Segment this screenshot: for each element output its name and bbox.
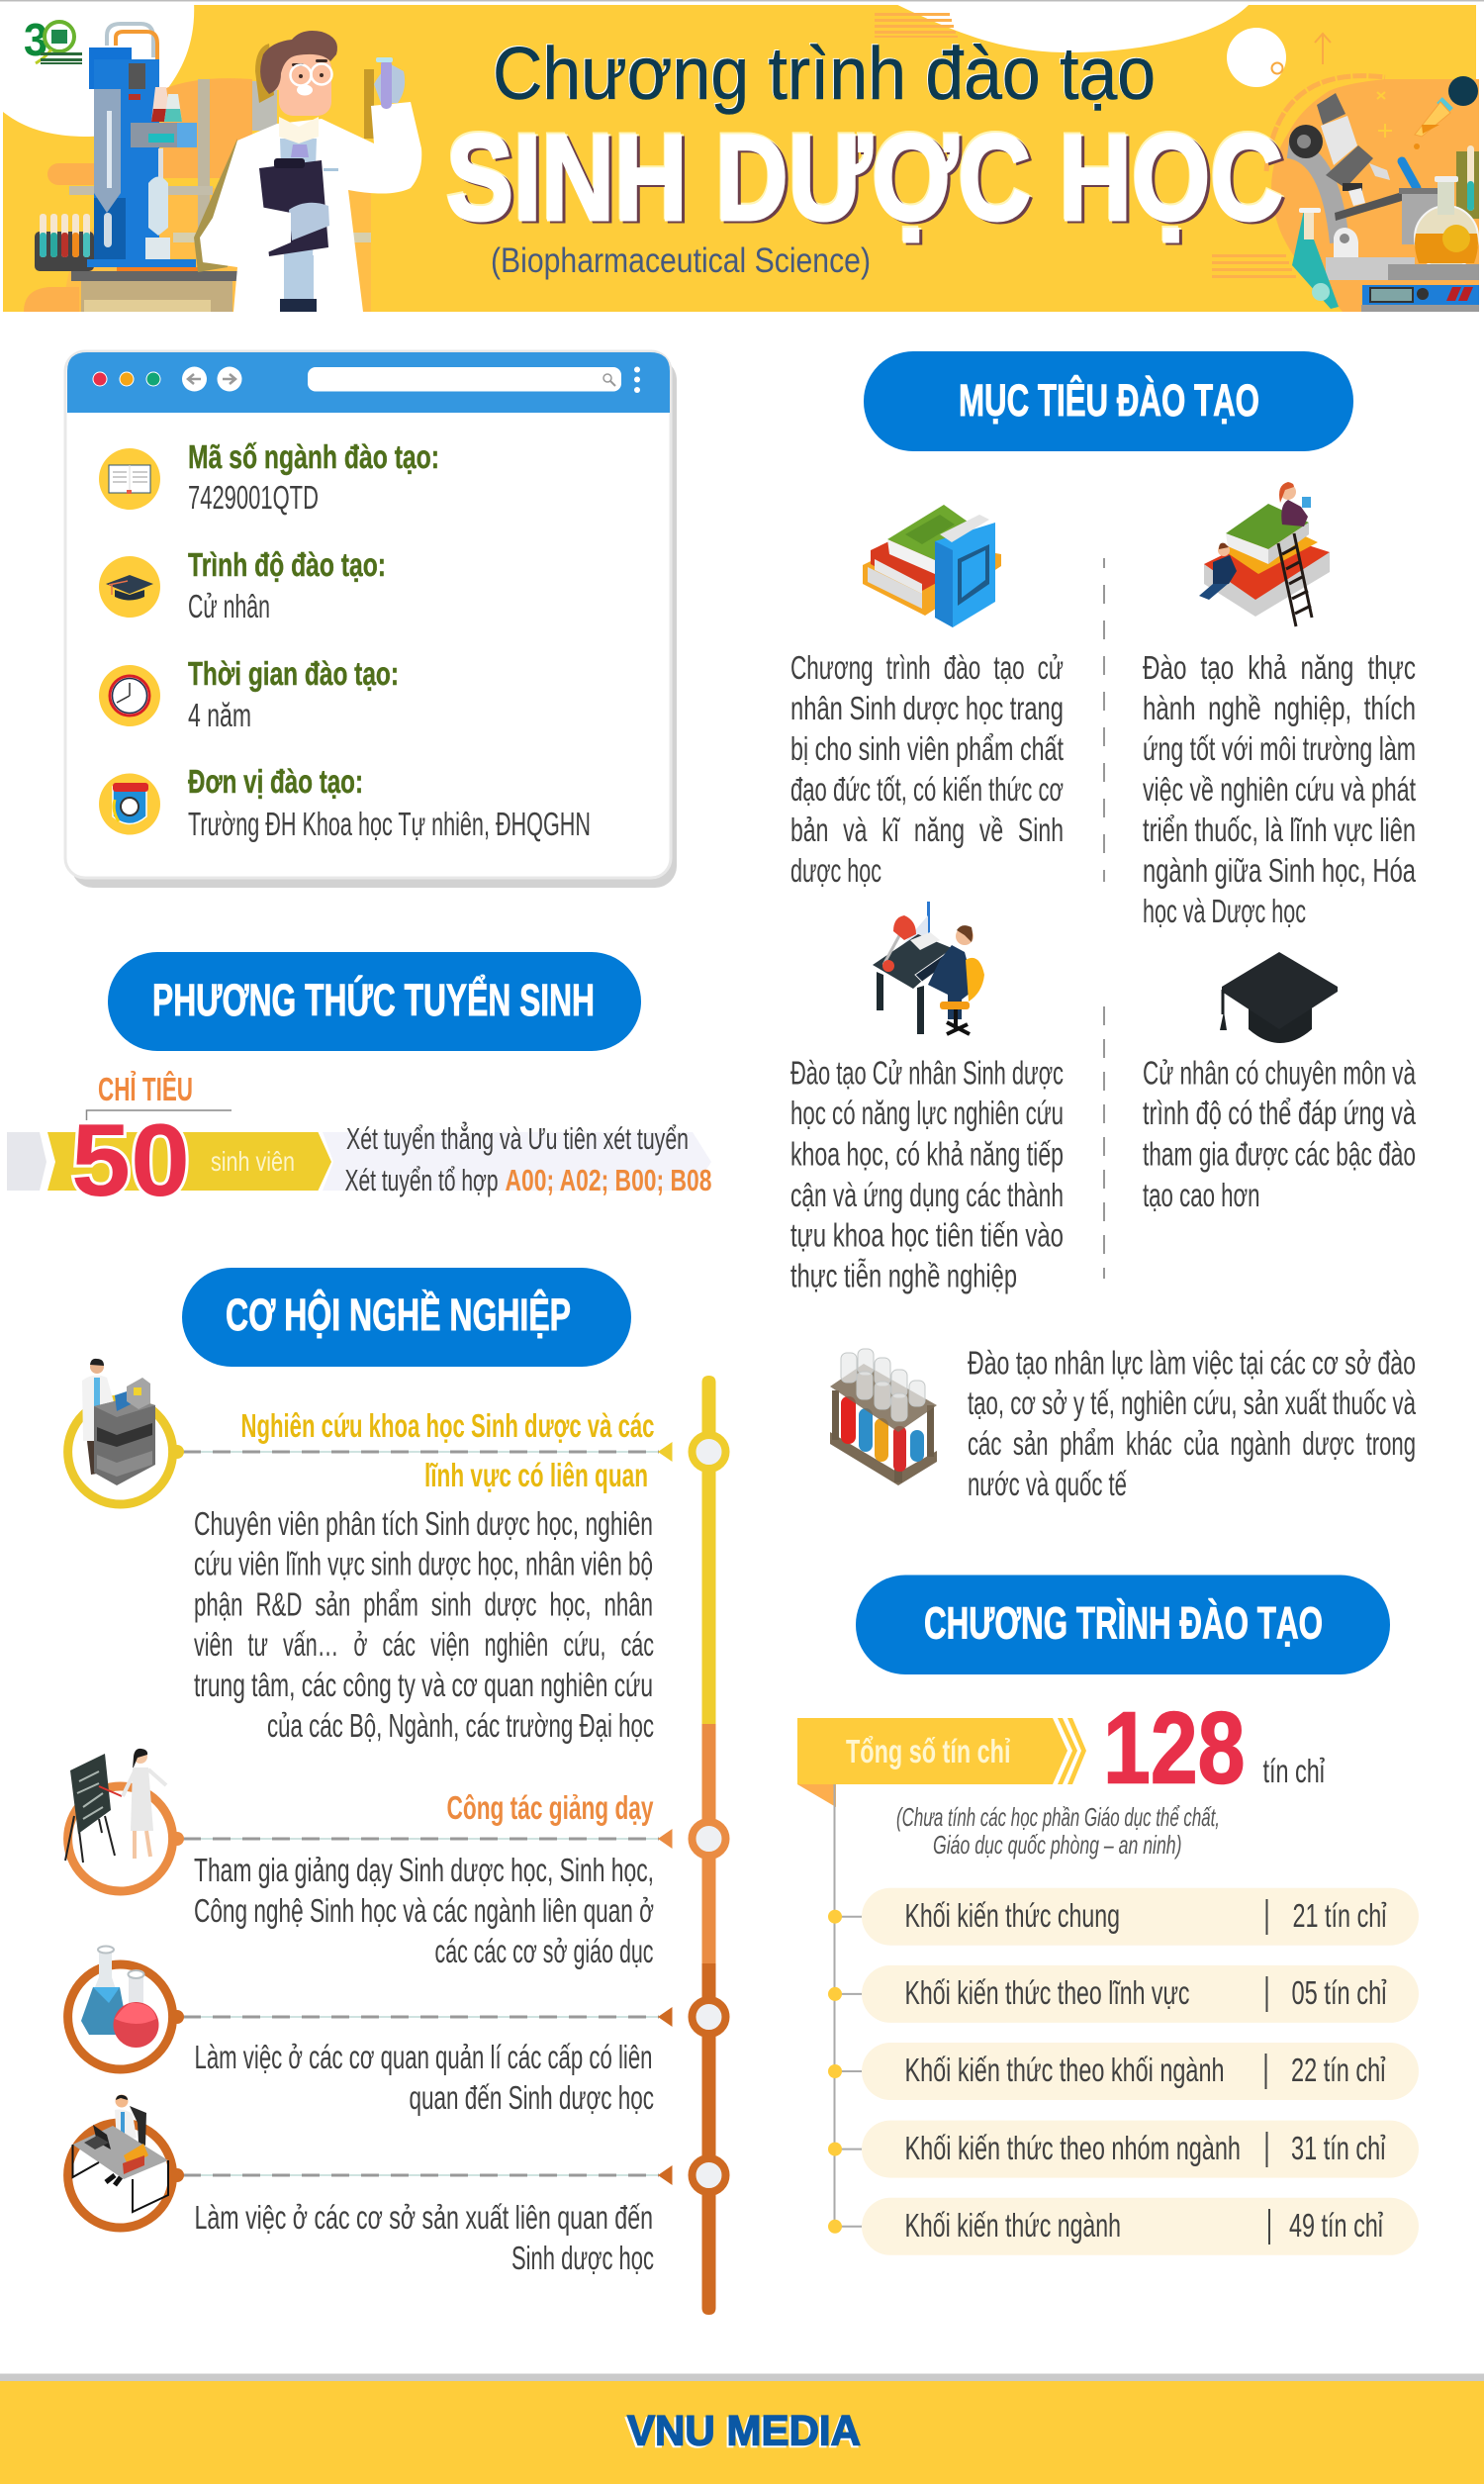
- objective: further study: tạo cao hơn: [1143, 1177, 1260, 1213]
- career item: teaching: [65, 1749, 673, 1969]
- career item: scientific research: trung tâm, các công ty và cơ quan nghiên cứu: [194, 1667, 653, 1703]
- objective: research capability: [790, 902, 1064, 1294]
- objective: research capability: học có năng lực nghiên cứu: [790, 1095, 1064, 1131]
- objective: research capability: khoa học, có khả năng tiếp: [790, 1136, 1064, 1172]
- panel: admission quota: A00; A02; B00; B08: [505, 1163, 712, 1197]
- footer: [0, 2373, 1484, 2484]
- icon: worker at desk: [73, 2094, 168, 2212]
- career item: administration: Làm việc ở các cơ quan quản lí các cấp có liên: [194, 2039, 653, 2075]
- row: general knowledge: 21 tín chỉ: [1292, 1897, 1387, 1934]
- panel: total credits: Giáo dục quốc phòng – an ninh): [933, 1830, 1181, 1860]
- panel: admission quota: sinh viên: [211, 1146, 295, 1177]
- logo: 30 years: [24, 14, 82, 65]
- illustration: laboratory equipment left: [24, 24, 371, 312]
- career item: administration: quan đến Sinh dược học: [410, 2079, 654, 2116]
- icon: graduation cap: [1220, 952, 1338, 1043]
- row: discipline block knowledge: 22 tín chỉ: [1291, 2052, 1386, 2088]
- logo: 30 years: 3: [24, 14, 47, 65]
- objective: ethics and knowledge: nhân Sinh dược học trang: [790, 690, 1064, 726]
- panel: total credits: Tổng số tín chỉ: [846, 1733, 1011, 1769]
- objective: ethics and knowledge: đạo đức tốt, có kiến thức cơ: [790, 771, 1064, 808]
- objective: ethics and knowledge: Chương trình đào tạo cử: [790, 649, 1064, 686]
- career item: teaching: Công tác giảng dạy: [447, 1789, 654, 1826]
- career item: scientific research: Nghiên cứu khoa học Sinh dược và các: [241, 1407, 655, 1444]
- footer: VNU MEDIA: [627, 2407, 861, 2454]
- info row: degree level: Trình độ đào tạo:: [188, 546, 386, 583]
- panel: total credits: [797, 1690, 1325, 1860]
- career item: scientific research: viên tư vấn… ở các viện nghiên cứu, các: [194, 1626, 654, 1663]
- row: field knowledge: Khối kiến thức theo lĩnh vực: [904, 1974, 1189, 2011]
- heading: training objectives: [864, 351, 1353, 451]
- career item: production: [68, 2094, 673, 2276]
- heading: admission methods: PHƯƠNG THỨC TUYỂN SINH: [152, 975, 595, 1025]
- row: general knowledge: [828, 1888, 1419, 1946]
- icon: test tube rack: [830, 1349, 937, 1485]
- panel: admission quota: [7, 1071, 712, 1218]
- objective: ethics and knowledge: bản và kĩ năng về Sinh: [790, 812, 1064, 848]
- panel: admission quota: 50: [71, 1103, 190, 1218]
- info row: major code: Mã số ngành đào tạo:: [188, 438, 439, 475]
- info row: degree level: [99, 546, 386, 624]
- career item: scientific research: [68, 1359, 673, 1744]
- objective: professional practice: [1143, 482, 1416, 929]
- illustration: laboratory equipment right: [1266, 34, 1479, 312]
- row: major knowledge: 49 tín chỉ: [1289, 2207, 1383, 2244]
- objective: further study: [1143, 952, 1416, 1213]
- objective: ethics and knowledge: dược học: [790, 852, 881, 889]
- icon: teacher at blackboard: [65, 1749, 166, 1863]
- icon: stack of books: [863, 505, 1001, 627]
- panel: admission quota: Xét tuyển tổ hợp: [344, 1163, 499, 1197]
- info row: major code: 7429001QTD: [188, 479, 319, 516]
- row: major knowledge: Khối kiến thức ngành: [904, 2207, 1121, 2244]
- objective: research capability: thực tiễn nghề nghiệp: [790, 1257, 1017, 1294]
- panel: program information browser card: [65, 351, 677, 888]
- row: field knowledge: 05 tín chỉ: [1292, 1974, 1387, 2011]
- info row: training unit: Đơn vị đào tạo:: [188, 763, 363, 800]
- heading: curriculum: CHƯƠNG TRÌNH ĐÀO TẠO: [924, 1597, 1323, 1649]
- row: discipline group knowledge: Khối kiến thức theo nhóm ngành: [904, 2130, 1241, 2166]
- career item: teaching: Công nghệ Sinh học và các ngành liên quan ở: [194, 1892, 654, 1929]
- objective: ethics and knowledge: [790, 505, 1064, 889]
- info row: major code: [99, 438, 439, 516]
- panel: admission quota: Xét tuyển thẳng và Ưu tiên xét tuyển: [346, 1120, 689, 1156]
- info row: duration: 4 năm: [188, 697, 251, 733]
- heading: training objectives: MỤC TIÊU ĐÀO TẠO: [959, 375, 1259, 426]
- heading: career opportunities: [182, 1268, 631, 1367]
- heading: curriculum: [856, 1576, 1390, 1674]
- row: discipline block knowledge: [828, 2043, 1419, 2100]
- panel: admission quota: CHỈ TIÊU: [98, 1071, 193, 1107]
- career item: teaching: Tham gia giảng dạy Sinh dược học, Sinh học,: [194, 1852, 654, 1888]
- info row: degree level: Cử nhân: [188, 588, 270, 624]
- icon: person at desk: [873, 902, 984, 1034]
- career item: scientific research: lĩnh vực có liên quan: [424, 1457, 648, 1493]
- career item: teaching: các các cơ sở giáo dục: [435, 1933, 653, 1969]
- row: major knowledge: [828, 2198, 1419, 2255]
- objective: workforce: [830, 1344, 1416, 1502]
- career item: scientific research: cứu viên lĩnh vực sinh dược học, nhân viên bộ: [194, 1546, 653, 1581]
- panel: total credits: tín chỉ: [1262, 1753, 1325, 1789]
- objective: research capability: Đào tạo Cử nhân Sinh dược: [790, 1055, 1064, 1091]
- career item: production: Làm việc ở các cơ sở sản xuất liên quan đến: [194, 2199, 653, 2236]
- info row: duration: [99, 655, 399, 733]
- panel: total credits: (Chưa tính các học phần Giáo dục thể chất,: [896, 1802, 1220, 1832]
- title: program line: Chương trình đào tạo: [493, 32, 1156, 115]
- career item: scientific research: phận R&D sản phẩm sinh dược học, nhân: [194, 1585, 653, 1623]
- row: general knowledge: Khối kiến thức chung: [904, 1897, 1120, 1934]
- career item: administration: [68, 1946, 673, 2116]
- chart: career timeline bar: [693, 1376, 726, 2315]
- objective: ethics and knowledge: bị cho sinh viên phẩm chất: [790, 730, 1064, 767]
- career item: scientific research: Chuyên viên phân tích Sinh dược học, nghiên: [194, 1505, 653, 1542]
- info row: training unit: Trường ĐH Khoa học Tự nhiên, ĐHQGHN: [188, 806, 591, 842]
- row: discipline group knowledge: 31 tín chỉ: [1291, 2130, 1386, 2166]
- career item: scientific research: của các Bộ, Ngành, các trường Đại học: [267, 1707, 654, 1744]
- row: discipline block knowledge: Khối kiến thức theo khối ngành: [904, 2052, 1225, 2088]
- objective: research capability: tựu khoa học tiên tiến vào: [790, 1217, 1064, 1253]
- heading: career opportunities: CƠ HỘI NGHỀ NGHIỆP: [226, 1290, 571, 1340]
- heading: admission methods: [108, 952, 641, 1051]
- illustration: scientist: [194, 31, 421, 312]
- objective: research capability: cận và ứng dụng các thành: [790, 1177, 1064, 1213]
- objective: workforce: nước và quốc tế: [968, 1466, 1127, 1502]
- row: discipline group knowledge: [828, 2121, 1419, 2178]
- info row: duration: Thời gian đào tạo:: [188, 655, 399, 692]
- career item: production: Sinh dược học: [511, 2240, 654, 2276]
- icon: researcher at equipment rack: [82, 1359, 155, 1485]
- info row: training unit: [99, 763, 591, 842]
- title: major name: SINH DƯỢC HỌC: [446, 111, 1283, 246]
- objective: professional practice: học và Dược học: [1143, 893, 1306, 929]
- title: english name: (Biopharmaceutical Science): [491, 241, 871, 280]
- chart: credit breakdown list: [828, 1784, 1419, 2255]
- icon: people on books with ladder: [1199, 482, 1330, 626]
- row: field knowledge: [828, 1965, 1419, 2023]
- icon: flasks: [81, 1946, 158, 2048]
- panel: total credits: 128: [1103, 1690, 1245, 1805]
